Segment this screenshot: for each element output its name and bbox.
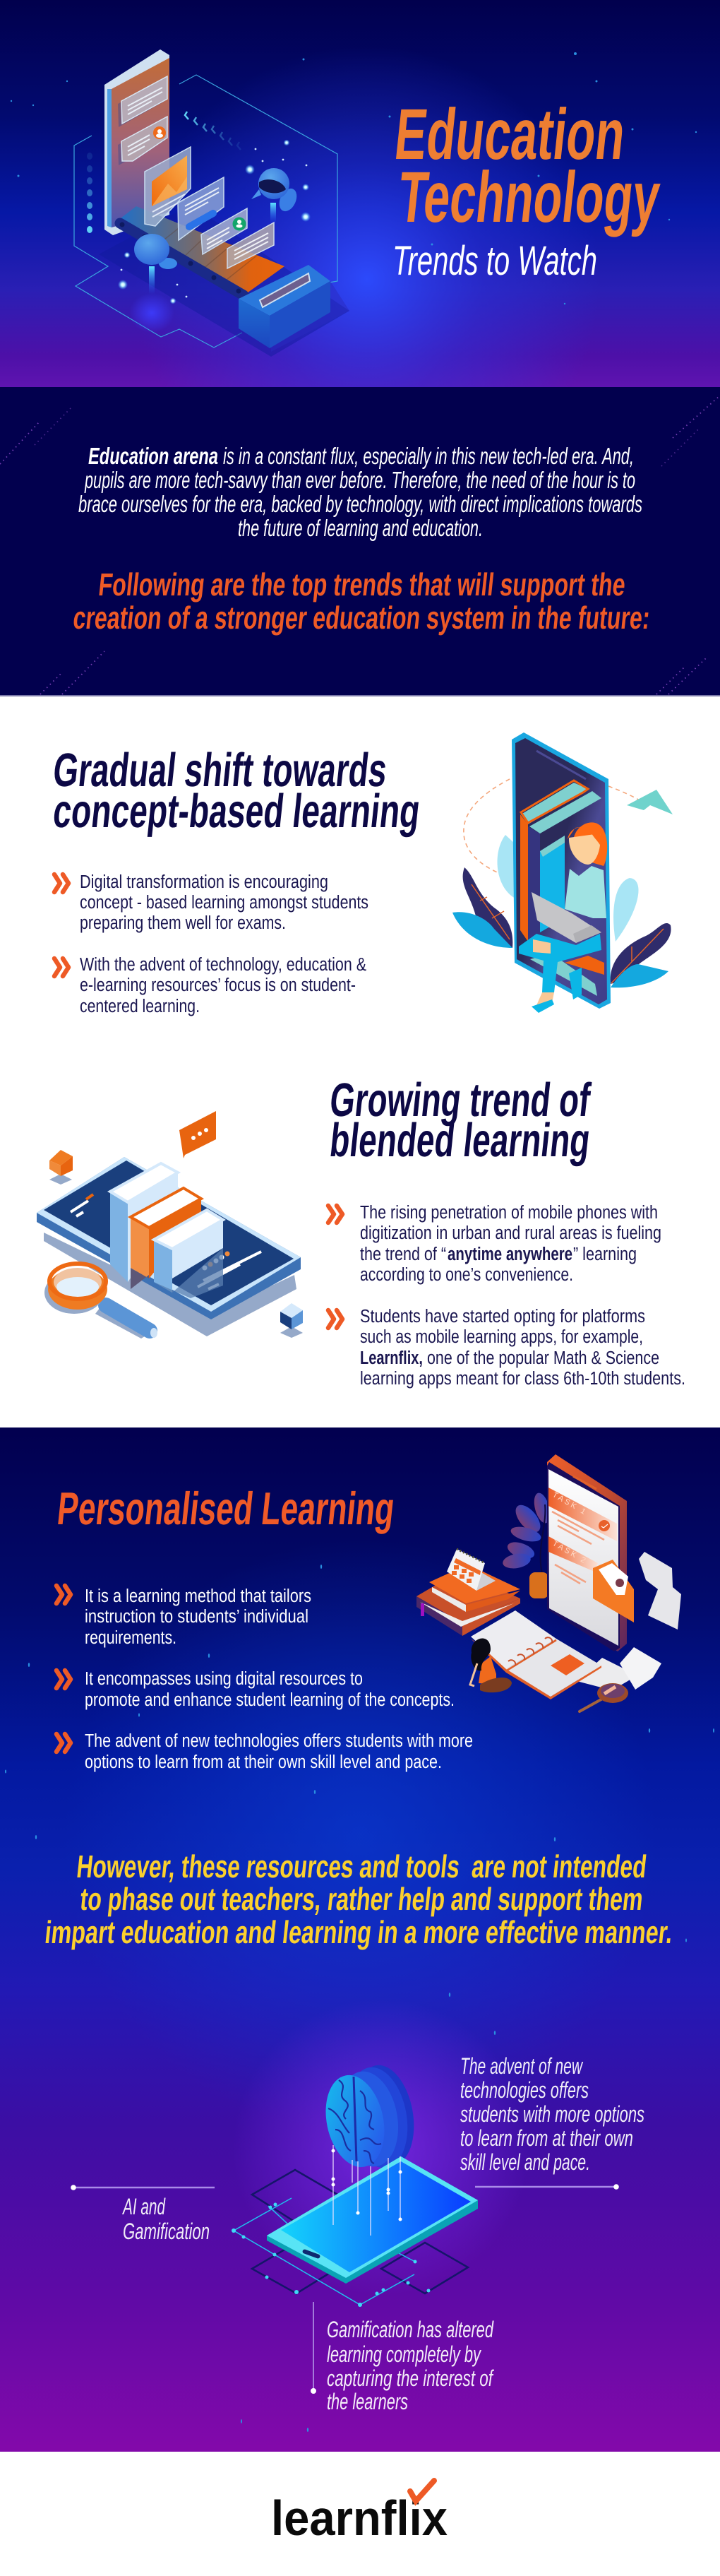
bullet 3-2: promote and enhance student learning of the concepts. xyxy=(85,1690,455,1710)
callout: left text xyxy=(71,2185,215,2244)
bullet 3-3: options to learn from at their own skill level and pace. xyxy=(85,1752,442,1772)
yellow callout xyxy=(43,1848,675,1950)
bullet 3-1: It is a learning method that tailors xyxy=(85,1586,311,1606)
bullet 3-2: It encompasses using digital resources to xyxy=(85,1669,363,1689)
bullet 3-3: The advent of new technologies offers students with more xyxy=(85,1731,473,1751)
heading: gradual shift: Gradual shift towards xyxy=(51,744,390,797)
callout: bottom text: learning completely by xyxy=(327,2341,481,2367)
bullet 2-2 xyxy=(328,1307,685,1389)
heading: gradual shift xyxy=(51,744,423,838)
intro text xyxy=(78,443,642,541)
hero panel xyxy=(0,0,720,387)
bullet 2-2: Students have started opting for platforms xyxy=(360,1307,645,1326)
callout: right text: skill level and pace. xyxy=(460,2149,590,2175)
subtitle: Trends to Watch xyxy=(392,238,597,284)
heading: personalised learning: Personalised Learning xyxy=(55,1483,397,1534)
bullet 3-3 xyxy=(56,1731,473,1772)
panel: white trends xyxy=(0,696,720,1428)
bullet 1-1: preparing them well for exams. xyxy=(80,913,286,933)
illustration: student on phone with books xyxy=(452,732,673,1013)
illustration: tasks phone, books and notebook: TASK 2 xyxy=(551,1539,589,1566)
illustration: brain over phone xyxy=(232,2060,478,2307)
bullet 1-2: e-learning resources’ focus is on student- xyxy=(80,975,356,995)
bullet 2-1: anytime anywhere xyxy=(448,1245,572,1264)
bullet 2-1 xyxy=(328,1203,661,1285)
intro text: the future of learning and education. xyxy=(238,515,483,541)
bullet 3-1: requirements. xyxy=(85,1628,176,1648)
illustration: tasks phone, books and notebook xyxy=(416,1454,681,1711)
illustration: phone with books and magnifier xyxy=(37,1111,303,1339)
heading: gradual shift: concept-based learning xyxy=(51,785,423,838)
heading: blended learning: Growing trend of xyxy=(328,1074,593,1127)
bullet 2-1: The rising penetration of mobile phones with xyxy=(360,1203,658,1223)
bullet 3-2 xyxy=(56,1669,455,1710)
panel: personalised learning dark background xyxy=(0,1428,720,2452)
bullet 1-1 xyxy=(54,872,368,933)
bullet 2-1: according to one’s convenience. xyxy=(360,1265,573,1285)
title: Education Technology xyxy=(391,93,664,237)
callout: bottom text xyxy=(311,2302,494,2414)
callout: right text xyxy=(460,2053,644,2190)
illustration: tasks phone, books and notebook: TASK 1 xyxy=(551,1490,589,1517)
callout: right text: to learn from at their own xyxy=(460,2125,633,2151)
illustration: conveyor and phone xyxy=(74,49,349,357)
intro panel xyxy=(0,387,720,696)
bullet 1-2 xyxy=(54,955,366,1016)
bullet 1-2: With the advent of technology, education & xyxy=(80,955,366,975)
callout: bottom text: capturing the interest of xyxy=(327,2366,494,2391)
callout: right text: The advent of new xyxy=(460,2053,583,2079)
callout: bottom text: the learners xyxy=(327,2389,408,2414)
bullet 3-1: instruction to students’ individual xyxy=(85,1607,308,1627)
heading: blended learning: blended learning xyxy=(328,1114,593,1167)
bullet 2-1: ” learning xyxy=(573,1245,637,1264)
bullet 3-1 xyxy=(56,1586,311,1648)
bullet 1-1: Digital transformation is encouraging xyxy=(80,872,328,892)
bullet 2-2: such as mobile learning apps, for example, xyxy=(360,1327,643,1347)
title dotted rule xyxy=(361,93,528,95)
intro text: Education arena xyxy=(88,443,218,469)
bullet 2-2: one of the popular Math & Science xyxy=(427,1348,659,1368)
bullet 1-1: concept - based learning amongst students xyxy=(80,893,368,913)
panel: footer xyxy=(0,2452,720,2576)
callout: right text: technologies offers xyxy=(460,2077,589,2103)
bullet 2-1: digitization in urban and rural areas is fueling xyxy=(360,1223,661,1243)
bullet 2-2: Learnflix, xyxy=(360,1348,423,1368)
bullet 1-2: centered learning. xyxy=(80,997,200,1016)
callout: bottom text: Gamification has altered xyxy=(327,2317,494,2342)
callout: left text: Gamification xyxy=(123,2219,210,2244)
heading: blended learning xyxy=(328,1074,593,1167)
orange callout xyxy=(71,566,652,636)
logo: learnflix: learnflix xyxy=(271,2491,448,2546)
bullet 2-1: the trend of “ xyxy=(360,1245,446,1264)
callout: left text: AI and xyxy=(122,2194,166,2219)
